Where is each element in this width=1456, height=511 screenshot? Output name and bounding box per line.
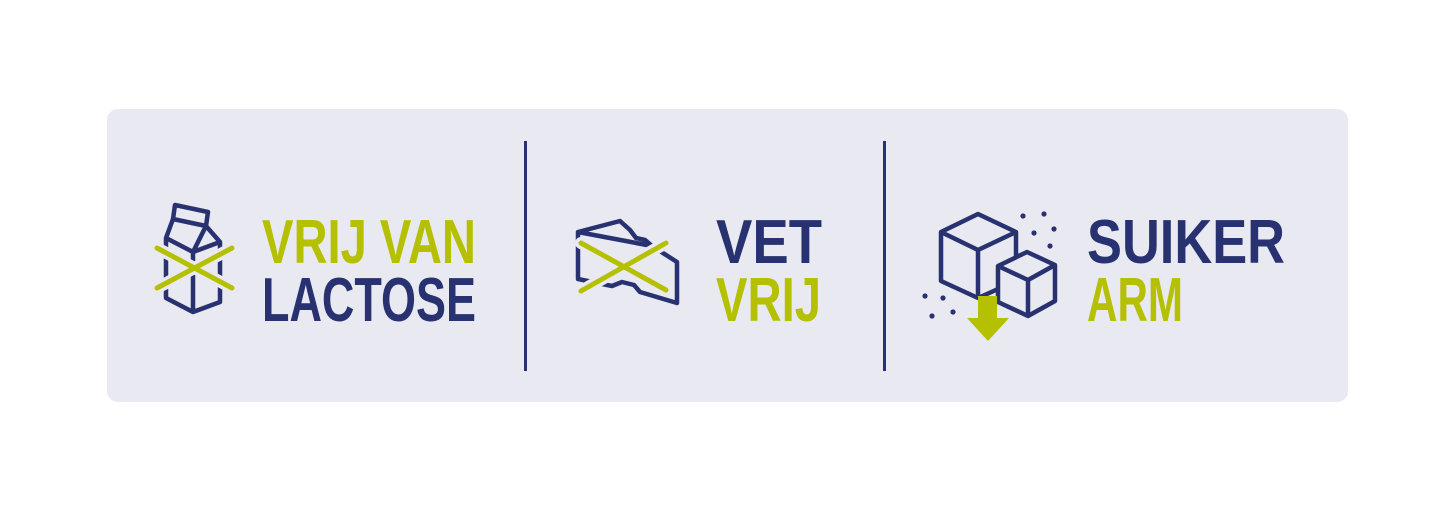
icon: sugar cubes with down arrow (922, 211, 1057, 341)
text: suiker arm (1087, 208, 1285, 335)
text: suiker arm: SUIKER (1087, 208, 1285, 277)
text: vrij van lactose: VRIJ VAN (262, 208, 476, 277)
text: suiker arm: ARM (1087, 266, 1183, 335)
icon: milk carton crossed (157, 205, 232, 312)
divider 2 (883, 141, 886, 371)
text: vrij van lactose: LACTOSE (262, 266, 476, 335)
text: vrij van lactose (262, 208, 476, 335)
panel background (107, 109, 1348, 402)
text: vet vrij (716, 208, 822, 335)
icon: cheese crossed (578, 221, 677, 303)
divider 1 (524, 141, 527, 371)
text: vet vrij: VET (716, 208, 822, 277)
text: vet vrij: VRIJ (716, 266, 821, 335)
